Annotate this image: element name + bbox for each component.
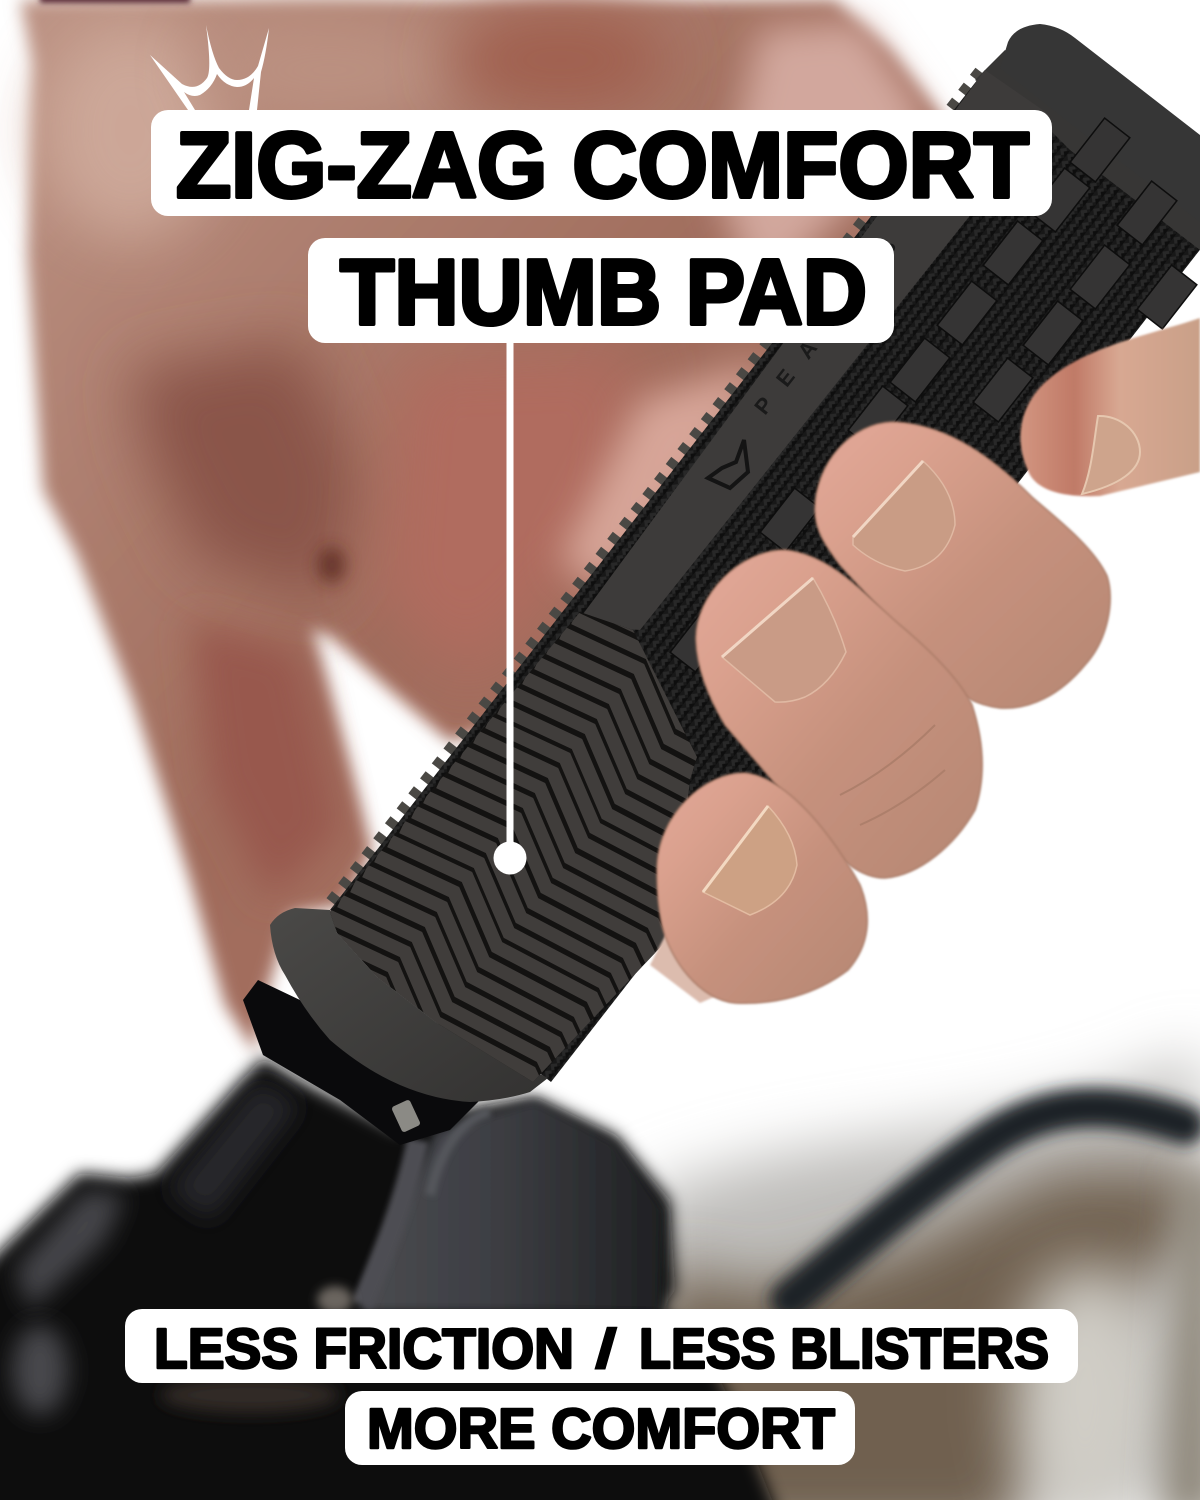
- top shadow: [450, 5, 670, 115]
- free edge: [722, 578, 813, 657]
- caption box 2: MORE COMFORT: [367, 1397, 835, 1461]
- handlebar grip: [243, 24, 1200, 1257]
- heading box 1: ZIG-ZAG COMFORT: [176, 113, 1029, 217]
- nail: [703, 806, 797, 915]
- lever: [358, 1100, 665, 1312]
- leader line with dot: [494, 340, 526, 874]
- free edge: [853, 461, 923, 537]
- caption box 1: LESS BLISTERS: [639, 1317, 1049, 1381]
- heading box 2: THUMB PAD: [340, 240, 867, 344]
- grey backdrop: [640, 1050, 1200, 1500]
- upper collar: [975, 50, 1200, 250]
- top centre highlight: [200, 20, 460, 120]
- grip body: [330, 70, 1200, 1082]
- zig-zag thumb pad: [330, 613, 697, 1082]
- bolt: [391, 1099, 421, 1133]
- nail: [1082, 416, 1140, 494]
- brown ground: [640, 1170, 1200, 1500]
- skin below little finger: [650, 930, 730, 1003]
- pale blob: [1015, 1265, 1155, 1500]
- crown logo: [150, 25, 269, 110]
- blurred hand behind the grip: [20, 0, 945, 1052]
- edge teeth: [330, 72, 981, 905]
- fingers: [650, 318, 1200, 1003]
- lower flange: [270, 908, 548, 1102]
- index fingertip: [1020, 318, 1200, 496]
- lower-left grey patch: [12, 1325, 68, 1415]
- free edge: [703, 806, 768, 892]
- crease shadow: [318, 547, 346, 583]
- blurred bike background: [0, 1050, 1200, 1500]
- top-right pale edge: [720, 20, 930, 300]
- right palm warm tone: [380, 350, 640, 680]
- dark top edge: [40, 0, 190, 3]
- brown patch below caption: [160, 1377, 340, 1413]
- lock ring: [243, 980, 480, 1145]
- spine along the top edge: [575, 70, 1050, 630]
- grey patch above caption: [317, 1286, 353, 1314]
- bracket highlight: [15, 1190, 125, 1310]
- nail: [853, 461, 955, 571]
- brand lettering: PEATY'S: [749, 234, 901, 419]
- joint crease: [840, 725, 945, 825]
- pink near the grip: [560, 360, 770, 590]
- mid-palm shadow band: [130, 340, 360, 600]
- far-right tone: [1160, 1170, 1200, 1500]
- second finger: [815, 422, 1110, 708]
- ridged strip: [362, 1140, 418, 1305]
- brake cable: [790, 1108, 1185, 1300]
- caption box 1: /: [594, 1317, 618, 1381]
- nail: [722, 578, 846, 702]
- small crown logo: [708, 440, 748, 488]
- caption box 1: LESS FRICTION: [154, 1317, 574, 1381]
- palm: [20, 0, 945, 1052]
- stem highlight: [168, 1080, 300, 1220]
- raised blocks: [670, 118, 1197, 672]
- top flange: [1000, 24, 1200, 222]
- top-left highlight: [40, 20, 220, 240]
- lower finger tone: [190, 620, 340, 900]
- caption box 1: [125, 1309, 1078, 1383]
- lever rim highlight: [430, 1112, 490, 1195]
- bar and controls dark mass: [0, 1057, 780, 1500]
- third finger: [696, 550, 982, 878]
- little finger: [657, 773, 867, 1003]
